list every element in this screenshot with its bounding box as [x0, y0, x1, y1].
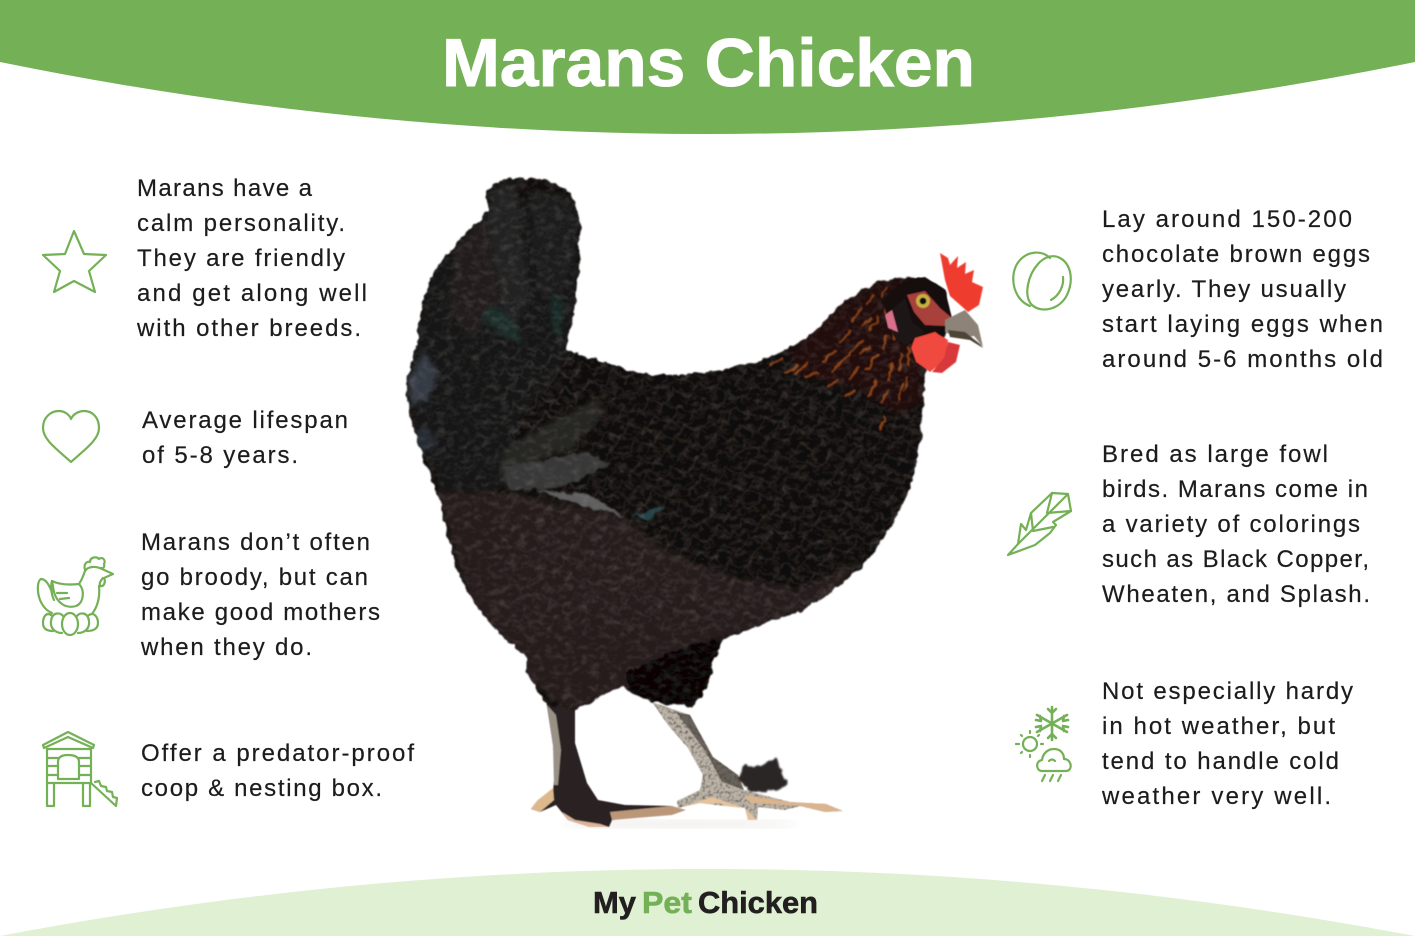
logo: My — [593, 885, 637, 920]
footer banner — [0, 869, 1415, 936]
fur noise — [400, 175, 930, 715]
text: eggs — [1102, 206, 1383, 373]
text: hardiness: tend to handle cold — [1102, 748, 1339, 775]
icon: feather — [1008, 493, 1071, 555]
orange flecks — [770, 288, 909, 428]
fluffy underbelly — [436, 490, 860, 712]
text: broodiness: make good mothers — [141, 599, 380, 626]
text: hardiness — [1101, 678, 1353, 810]
text: lifespan: of 5-8 years. — [142, 442, 298, 469]
text: lifespan — [142, 407, 348, 469]
header banner — [0, 0, 1415, 134]
text: broodiness — [140, 529, 380, 661]
text: broodiness: Marans don’t often — [141, 529, 370, 556]
eye — [916, 294, 930, 308]
beak — [945, 310, 983, 347]
far leg and foot — [650, 700, 845, 825]
icon: chicken coop — [43, 732, 117, 806]
icon: hen on eggs — [38, 557, 113, 635]
folded wing feathers — [500, 400, 605, 490]
icon: weather — [1016, 707, 1071, 781]
text: colorings: such as Black Copper, — [1102, 546, 1369, 573]
text: eggs: Lay around 150-200 — [1102, 206, 1352, 233]
icon: star — [43, 231, 106, 292]
wattle — [911, 332, 948, 372]
text: broodiness: go broody, but can — [141, 564, 368, 591]
text: colorings: a variety of colorings — [1102, 511, 1360, 538]
text: colorings: Wheaten, and Splash. — [1102, 581, 1370, 608]
logo: Pet — [642, 885, 692, 920]
near leg and foot — [531, 700, 686, 827]
text: personality: Marans have a — [137, 175, 313, 202]
text: personality: with other breeds. — [136, 315, 361, 342]
text: coop: Offer a predator-proof — [141, 740, 414, 767]
face skin — [907, 291, 952, 326]
logo: Chicken — [698, 885, 818, 920]
text: broodiness: when they do. — [140, 634, 312, 661]
text: hardiness: in hot weather, but — [1102, 713, 1335, 740]
text: personality — [136, 175, 367, 342]
icon: eggs — [1013, 253, 1071, 310]
text: personality: calm personality. — [137, 210, 345, 237]
text: lifespan: Average lifespan — [142, 407, 348, 434]
plumage texture — [400, 175, 930, 715]
floor shadow — [560, 820, 800, 828]
logo — [593, 885, 818, 920]
text: colorings — [1102, 441, 1370, 608]
text: coop — [141, 740, 414, 802]
ear lobe — [885, 310, 898, 332]
text: eggs: chocolate brown eggs — [1102, 241, 1370, 268]
head — [882, 253, 983, 373]
body silhouette — [405, 178, 950, 710]
icon: heart — [43, 411, 99, 462]
text: eggs: yearly. They usually — [1102, 276, 1346, 303]
back scale feathers — [500, 350, 920, 630]
text: personality: and get along well — [137, 280, 367, 307]
text: colorings: birds. Marans come in — [1102, 476, 1368, 503]
comb — [940, 253, 983, 312]
text: personality: They are friendly — [137, 245, 345, 272]
text: hardiness: weather very well. — [1101, 783, 1331, 810]
text: eggs: around 5-6 months old — [1102, 346, 1383, 373]
title: Marans Chicken — [442, 25, 975, 101]
text: hardiness: Not especially hardy — [1102, 678, 1353, 705]
text: colorings: Bred as large fowl — [1102, 441, 1328, 468]
text: coop: coop & nesting box. — [141, 775, 382, 802]
chicken illustration — [400, 175, 983, 828]
text: eggs: start laying eggs when — [1102, 311, 1383, 338]
dark tail fan — [405, 200, 580, 490]
body with plumage — [400, 175, 950, 715]
neck hackle shading — [790, 277, 922, 415]
